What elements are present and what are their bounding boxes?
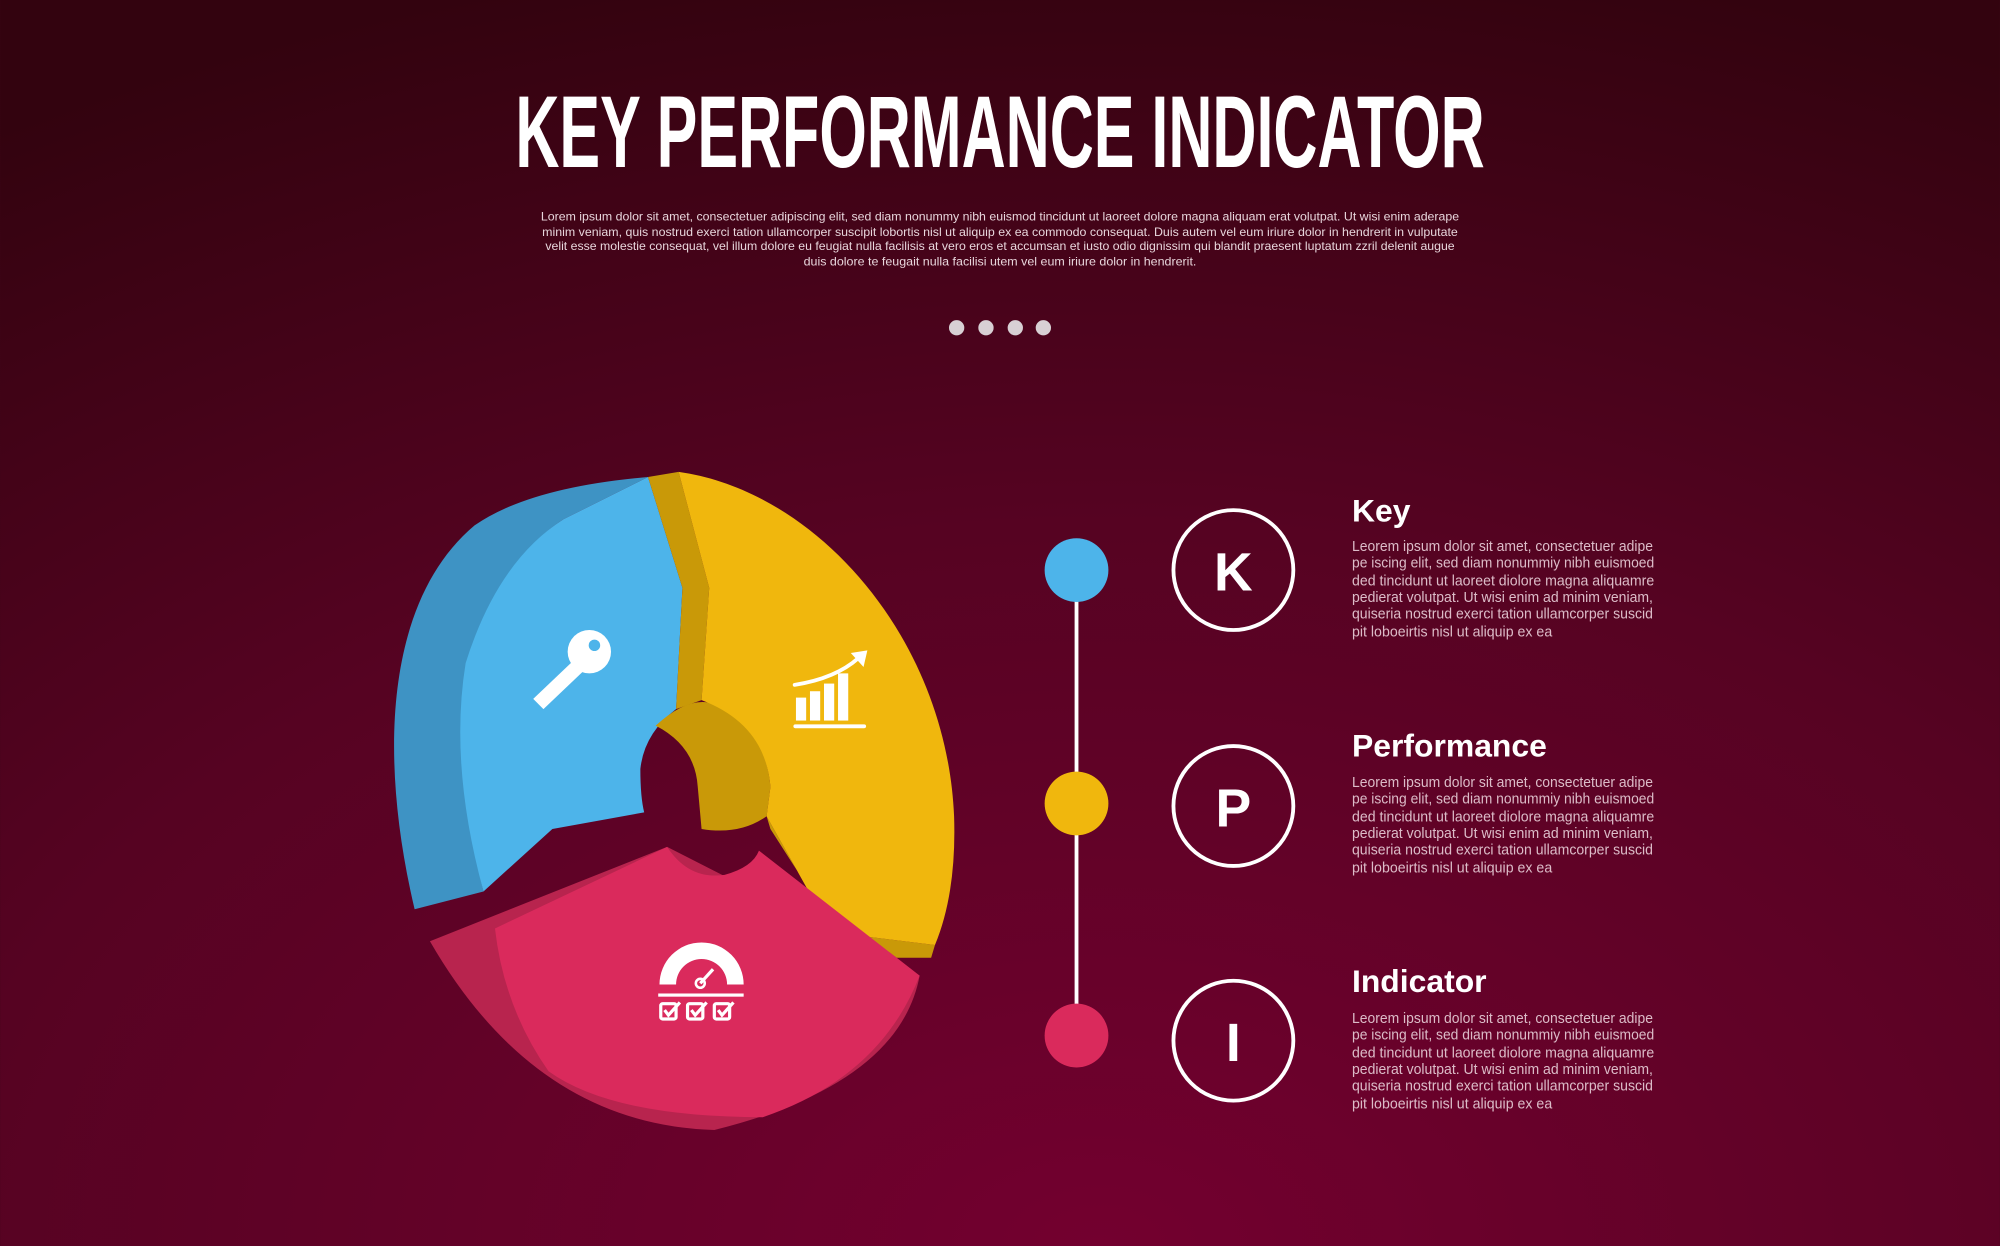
icon: key (533, 630, 611, 709)
3D pie chart (394, 472, 954, 1130)
timeline connector (1045, 538, 1108, 1067)
text block: Key: ded tincidunt ut laoreet diolore magna aliquamre (1352, 573, 1654, 589)
letter badge: I (1173, 981, 1293, 1101)
text block: Performance: Performance (1352, 727, 1547, 763)
text block: Key: pe iscing elit, sed diam nonummiy nibh euismoed (1352, 556, 1654, 572)
letter badge: K (1173, 510, 1293, 630)
text block: Indicator (1352, 963, 1654, 1112)
intro paragraph (541, 210, 1459, 268)
text block: Indicator: Indicator (1352, 963, 1487, 999)
text block: Performance: pe iscing elit, sed diam nonummiy nibh euismoed (1352, 791, 1654, 807)
text block: Key: quiseria nostrud exerci tation ullamcorper suscid (1352, 607, 1653, 623)
text block: Indicator: pe iscing elit, sed diam nonummiy nibh euismoed (1352, 1027, 1654, 1043)
text block: Key: pedierat volutpat. Ut wisi enim ad minim veniam, (1352, 590, 1653, 606)
text block: Key: Leorem ipsum dolor sit amet, consectetuer adipe (1352, 539, 1653, 555)
dot: blue (1045, 538, 1108, 602)
text block: Indicator: pit loboeirtis nisl ut aliquip ex ea (1352, 1096, 1553, 1112)
text block: Indicator: Leorem ipsum dolor sit amet, consectetuer adipe (1352, 1011, 1653, 1027)
segment: yellow (Performance) (648, 472, 954, 958)
dot: yellow (1045, 772, 1108, 835)
text block: Indicator: quiseria nostrud exerci tation ullamcorper suscid (1352, 1078, 1653, 1094)
segment: blue (Key) (394, 477, 682, 909)
text block: Performance: Leorem ipsum dolor sit amet, consectetuer adipe (1352, 775, 1653, 791)
text block: Indicator: ded tincidunt ut laoreet diolore magna aliquamre (1352, 1045, 1654, 1061)
intro paragraph: minim veniam, quis nostrud exerci tation ullamcorper suscipit lobortis nisl ut aliquip ex ea commodo consequat. Duis autem vel eum iriure dolor in hendrerit in vulputate (542, 225, 1458, 239)
text block: Performance: quiseria nostrud exerci tation ullamcorper suscid (1352, 842, 1653, 858)
dot: red (1045, 1004, 1108, 1067)
segment: red (Indicator) (430, 847, 920, 1130)
icon: growth chart (793, 650, 867, 728)
text block: Performance: pit loboeirtis nisl ut aliquip ex ea (1352, 860, 1553, 876)
intro paragraph: Lorem ipsum dolor sit amet, consectetuer adipiscing elit, sed diam nonummy nibh euismod tincidunt ut laoreet dolore magna aliquam erat volutpat. Ut wisi enim aderape (541, 210, 1459, 224)
letter badge: P (1173, 746, 1293, 866)
letter badge: P: P (1216, 779, 1251, 838)
intro paragraph: velit esse molestie consequat, vel illum dolore eu feugiat nulla facilisis at vero eros et accumsan et iusto odio dignissim qui blandit praesent luptatum zzril delenit augue (545, 239, 1455, 253)
icon: gauge with checkboxes (658, 942, 744, 1019)
letter badge: I: I (1226, 1014, 1241, 1073)
intro paragraph: duis dolore te feugait nulla facilisi utem vel eum iriure dolor in hendrerit. (804, 254, 1196, 268)
text block: Key: Key (1352, 493, 1411, 529)
text block: Key (1352, 493, 1654, 640)
letter badge: K: K (1214, 543, 1253, 602)
text block: Performance (1352, 727, 1654, 876)
text block: Key: pit loboeirtis nisl ut aliquip ex ea (1352, 624, 1553, 640)
text block: Performance: pedierat volutpat. Ut wisi enim ad minim veniam, (1352, 826, 1653, 842)
pagination dots (949, 320, 1051, 335)
text block: Indicator: pedierat volutpat. Ut wisi enim ad minim veniam, (1352, 1062, 1653, 1078)
text block: Performance: ded tincidunt ut laoreet diolore magna aliquamre (1352, 809, 1654, 825)
